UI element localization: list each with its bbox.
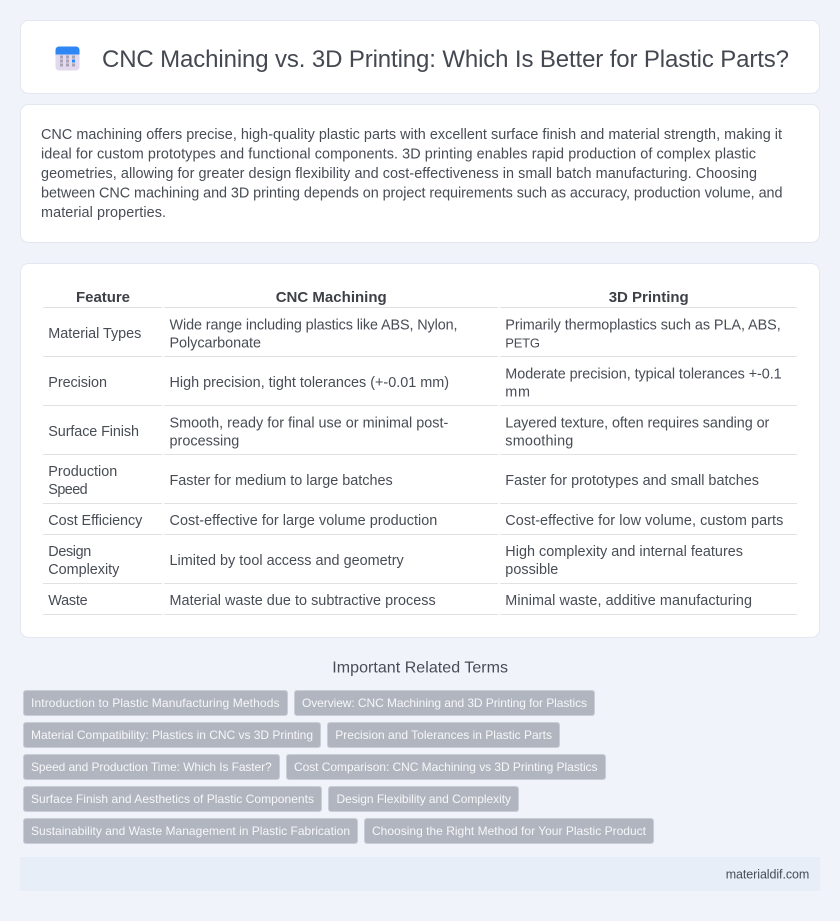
row: waste: Material waste due to subtractive process: [170, 593, 436, 609]
row: surface finish: smoothing: [505, 433, 573, 449]
chip: Speed and Production Time: Which Is Faster?: [31, 760, 272, 774]
row: material types: [48, 317, 781, 351]
row: waste: Minimal waste, additive manufacturing: [505, 593, 752, 609]
footer source text: materialdif.com: [726, 867, 809, 881]
text block: summary: ideal for custom prototypes and functional components. 3D printing enables rapid production of complex plastic: [41, 146, 756, 162]
panel: description: [20, 104, 820, 242]
text block: summary: between CNC machining and 3D printing depends on project requirements such as accuracy, production volume, and: [41, 186, 782, 202]
table header row: [76, 289, 689, 306]
chip: Choosing the Right Method for Your Plastic Product: [372, 824, 647, 838]
chip: Introduction to Plastic Manufacturing Methods: [31, 696, 280, 710]
chip: Overview: CNC Machining and 3D Printing for Plastics: [302, 696, 587, 710]
related terms chips: [24, 690, 654, 844]
row: precision: Moderate precision, typical tolerances +-0.1: [505, 366, 782, 382]
row: cost efficiency: [48, 513, 783, 529]
text block: summary: CNC machining offers precise, high-quality plastic parts with excellent surface finish and material strength, making it: [41, 127, 782, 143]
row: material types: Wide range including plastics like ABS, Nylon,: [170, 317, 458, 333]
text block: summary: geometries, allowing for greater design flexibility and cost-effectiveness in small batch manufacturing. Choosing: [41, 166, 757, 182]
chip: [328, 722, 560, 748]
row: design complexity: [48, 544, 743, 578]
chip: Surface Finish and Aesthetics of Plastic Components: [31, 792, 314, 806]
row: surface finish: Smooth, ready for final use or minimal post-: [170, 415, 449, 431]
panel: comparison table: [20, 264, 820, 638]
row: design complexity: High complexity and internal features: [505, 544, 743, 560]
chip: Precision and Tolerances in Plastic Parts: [335, 728, 552, 742]
text block: summary: material properties.: [41, 205, 166, 221]
chip: [286, 754, 606, 780]
row: production speed: [48, 464, 759, 498]
row: precision: [48, 366, 782, 400]
chip: Sustainability and Waste Management in Plastic Fabrication: [31, 824, 350, 838]
chip: [24, 818, 358, 844]
row: surface finish: [48, 415, 770, 449]
row: material types: Material Types: [48, 326, 141, 342]
chip: Design Flexibility and Complexity: [336, 792, 511, 806]
row: cost efficiency: Cost-effective for low volume, custom parts: [505, 513, 783, 529]
row: design complexity: Design: [48, 544, 91, 560]
chip: [24, 690, 288, 716]
table header row: CNC Machining: [276, 289, 387, 306]
row: cost efficiency: Cost Efficiency: [48, 513, 143, 529]
row: waste: Waste: [48, 593, 88, 609]
row: material types: PETG: [505, 335, 540, 350]
row: precision: mm: [505, 384, 530, 400]
row: surface finish: Surface Finish: [48, 424, 139, 440]
chip: [24, 786, 322, 812]
row: precision: High precision, tight tolerances (+-0.01 mm): [170, 375, 449, 391]
row: surface finish: processing: [170, 433, 239, 449]
row: material types: Primarily thermoplastics such as PLA, ABS,: [505, 317, 781, 333]
chip: [24, 722, 320, 748]
row: surface finish: Layered texture, often requires sanding or: [505, 415, 770, 431]
row: production speed: Production: [48, 464, 117, 480]
icon: calendar: [56, 46, 80, 70]
table header row: Feature: [76, 289, 130, 306]
table header row: 3D Printing: [609, 289, 689, 306]
row: precision: Precision: [48, 375, 107, 391]
chip: Material Compatibility: Plastics in CNC vs 3D Printing: [31, 728, 313, 742]
text block: summary: [41, 127, 782, 221]
row: production speed: Faster for medium to large batches: [170, 473, 393, 489]
chip: [24, 754, 280, 780]
chip: [364, 818, 654, 844]
row: design complexity: Limited by tool access and geometry: [170, 553, 404, 569]
row: waste: [48, 593, 752, 609]
row: production speed: Speed: [48, 482, 88, 498]
row: material types: Polycarbonate: [170, 335, 261, 351]
row: design complexity: possible: [505, 562, 558, 578]
row: cost efficiency: Cost-effective for large volume production: [170, 513, 437, 529]
title: CNC Machining vs. 3D Printing: Which Is Better for Plastic Parts?: [102, 46, 789, 73]
row: production speed: Faster for prototypes and small batches: [505, 473, 759, 489]
footer: [20, 857, 820, 891]
chip: [294, 690, 594, 716]
panel: header: [20, 20, 820, 94]
chip: Cost Comparison: CNC Machining vs 3D Printing Plastics: [294, 760, 598, 774]
row: design complexity: Complexity: [48, 562, 120, 578]
heading: important related terms: Important Related Terms: [332, 660, 508, 677]
chip: [328, 786, 518, 812]
